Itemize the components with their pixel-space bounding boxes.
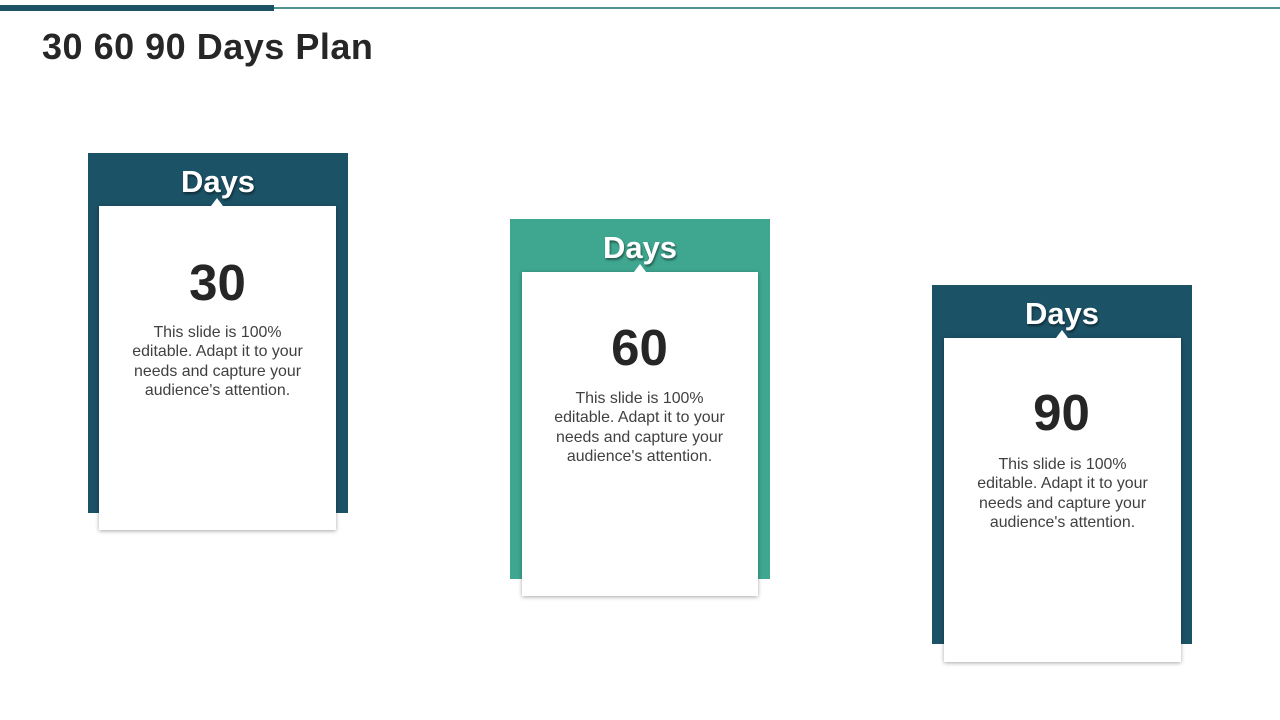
description text: This slide is 100% bbox=[998, 456, 1127, 473]
description text: This slide is 100% bbox=[153, 324, 282, 341]
top rule: thick accent bbox=[0, 5, 274, 11]
heading: Days: Days bbox=[603, 230, 677, 265]
description text bbox=[977, 456, 1148, 531]
description text: editable. Adapt it to your bbox=[132, 343, 303, 360]
panel background band bbox=[510, 219, 770, 579]
panel background band bbox=[932, 285, 1192, 644]
card pointer bbox=[634, 264, 646, 272]
description text: audience's attention. bbox=[990, 514, 1135, 531]
heading: Days: Days bbox=[1025, 296, 1099, 331]
description text bbox=[554, 390, 725, 465]
number 60: 60 bbox=[611, 319, 668, 376]
number 90: 90 bbox=[1033, 384, 1090, 441]
description text: editable. Adapt it to your bbox=[977, 475, 1148, 492]
heading: Days: Days bbox=[181, 164, 255, 199]
description text: audience's attention. bbox=[145, 382, 290, 399]
card pointer bbox=[211, 198, 223, 206]
description text bbox=[132, 324, 303, 399]
panel: 30 days bbox=[88, 153, 348, 534]
description text: audience's attention. bbox=[567, 448, 712, 465]
number 30: 30 bbox=[189, 254, 246, 311]
top rule: thin line bbox=[274, 7, 1280, 9]
panel background band bbox=[88, 153, 348, 513]
card pointer bbox=[1056, 330, 1068, 338]
description text: needs and capture your bbox=[556, 429, 723, 446]
description text: editable. Adapt it to your bbox=[554, 409, 725, 426]
title: 30 60 90 Days Plan bbox=[42, 26, 373, 67]
panel: 60 days bbox=[510, 219, 770, 600]
description text: needs and capture your bbox=[979, 495, 1146, 512]
description text: This slide is 100% bbox=[575, 390, 704, 407]
panel: 90 days bbox=[932, 285, 1192, 666]
white card bbox=[522, 272, 758, 596]
white card bbox=[944, 338, 1181, 662]
white card bbox=[99, 206, 336, 530]
description text: needs and capture your bbox=[134, 363, 301, 380]
